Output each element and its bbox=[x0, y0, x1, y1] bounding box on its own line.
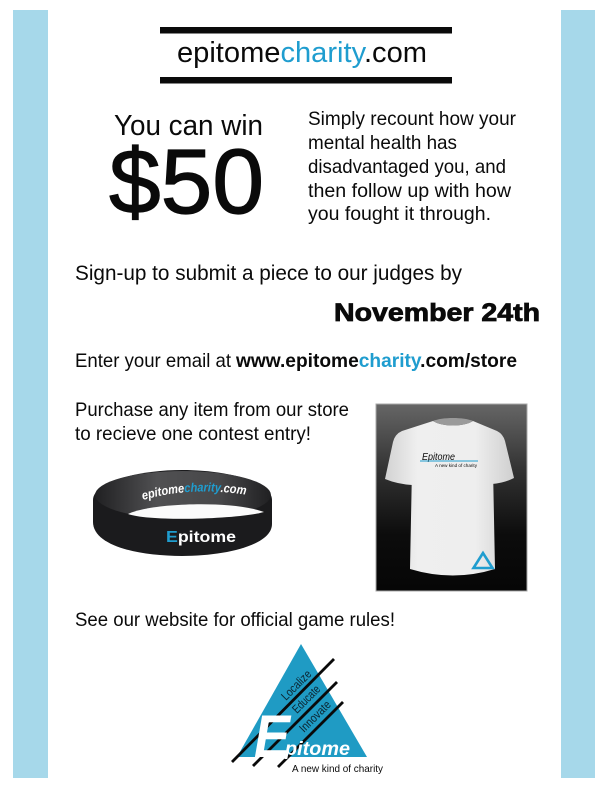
contest description: you fought it through. bbox=[308, 203, 491, 225]
email instruction: Enter your email at bbox=[75, 350, 232, 372]
right side band bbox=[561, 10, 595, 778]
purchase instruction bbox=[75, 399, 349, 445]
email instruction bbox=[75, 350, 517, 372]
left side band bbox=[13, 10, 48, 778]
Epitome logo: E bbox=[254, 703, 292, 770]
Epitome logo: pitome bbox=[284, 739, 350, 760]
contest description: then follow up with how bbox=[308, 180, 512, 202]
Epitome logo: Innovate bbox=[296, 697, 334, 735]
contest description: disadvantaged you, and bbox=[308, 156, 506, 178]
email instruction: www.epitomecharity.com/store bbox=[235, 350, 517, 372]
t-shirt photo: Epitome bbox=[422, 452, 455, 463]
t-shirt photo: A new kind of charity bbox=[435, 463, 478, 468]
prize heading: You can win bbox=[114, 110, 263, 142]
website header bbox=[160, 27, 452, 84]
sign-up line: Sign-up to submit a piece to our judges by bbox=[75, 262, 462, 285]
prize heading: $50 bbox=[109, 131, 264, 233]
wristband photo bbox=[93, 470, 272, 556]
deadline date: November 24th bbox=[334, 299, 540, 327]
t-shirt photo bbox=[376, 404, 527, 591]
contest description: mental health has bbox=[308, 132, 457, 154]
Epitome logo: Educate bbox=[289, 682, 323, 716]
Epitome logo: Localize bbox=[278, 667, 314, 703]
wristband photo: Epitome bbox=[166, 529, 236, 546]
contest description: Simply recount how your bbox=[308, 108, 516, 130]
Epitome logo: A new kind of charity bbox=[292, 763, 384, 775]
rules note: See our website for official game rules! bbox=[75, 609, 395, 631]
contest description bbox=[308, 108, 516, 225]
Epitome logo bbox=[232, 644, 384, 775]
purchase instruction: Purchase any item from our store bbox=[75, 399, 349, 421]
wristband photo: epitomecharity.com bbox=[142, 482, 246, 501]
website header: epitomecharity.com bbox=[177, 37, 427, 69]
purchase instruction: to recieve one contest entry! bbox=[75, 423, 311, 445]
